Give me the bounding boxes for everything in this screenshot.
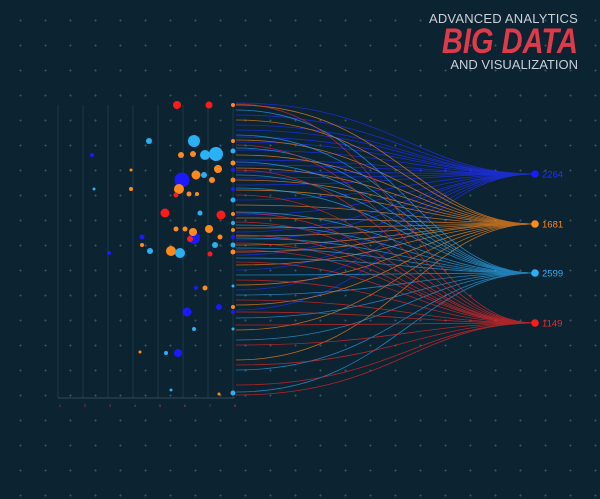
flow lines: red <box>236 104 535 395</box>
node: blue 2264 <box>531 170 563 180</box>
axis grid <box>58 105 235 398</box>
main title: BIG DATA <box>442 22 578 61</box>
node: cyan 2599 <box>531 268 563 280</box>
flow lines: blue <box>236 103 535 310</box>
flow lines: orange <box>236 105 535 360</box>
subtitle bottom: AND VISUALIZATION <box>450 57 578 72</box>
bubbles <box>90 101 236 396</box>
node: red 1149: 1149 <box>542 318 562 330</box>
axis labels: 7 <box>209 403 212 408</box>
subtitle top: ADVANCED ANALYTICS <box>429 11 578 26</box>
node: orange 1681: 1681 <box>542 220 563 230</box>
axis labels: 5 <box>159 403 162 408</box>
node: orange 1681 <box>531 220 563 230</box>
axis labels: 1 <box>59 403 62 408</box>
axis labels <box>59 403 237 408</box>
axis labels: 6 <box>184 403 187 408</box>
axis labels: 3 <box>109 403 112 408</box>
node: red 1149 <box>531 318 562 330</box>
axis labels: 4 <box>134 403 137 408</box>
node: blue 2264: 2264 <box>542 170 563 180</box>
node: cyan 2599: 2599 <box>542 268 563 280</box>
title block <box>429 11 578 72</box>
axis labels: 2 <box>84 403 87 408</box>
axis labels: 8 <box>234 403 237 408</box>
flow lines: cyan <box>236 110 535 392</box>
